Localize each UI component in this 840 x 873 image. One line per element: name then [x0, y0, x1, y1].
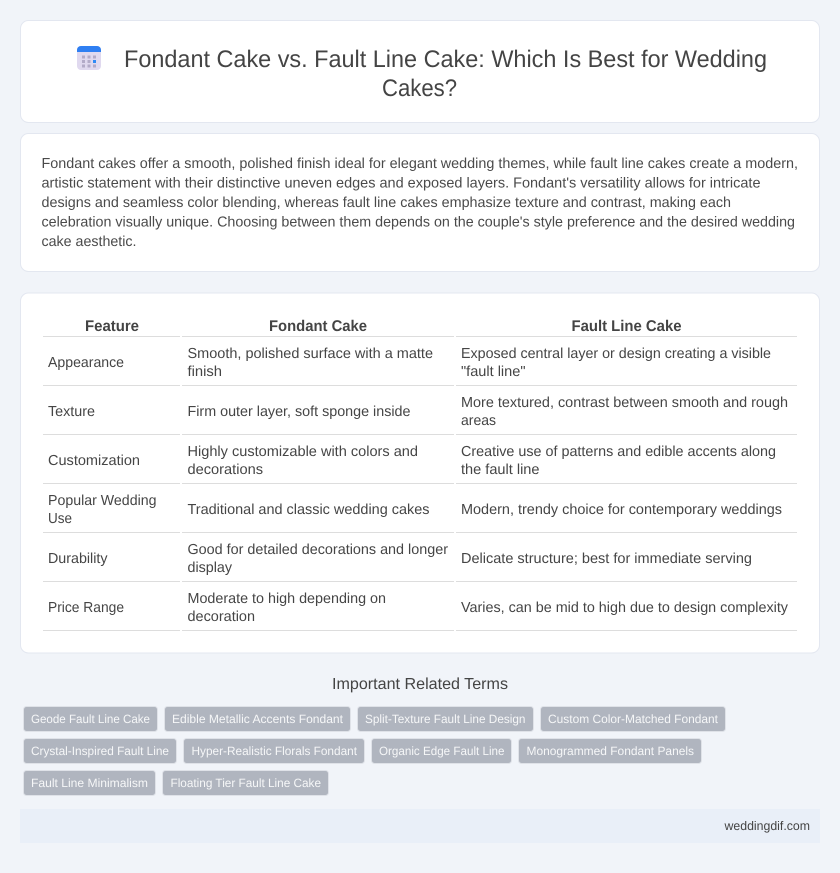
title: Cakes?	[382, 75, 457, 102]
tag: Fault Line Minimalism	[31, 776, 148, 790]
row: appearance	[48, 346, 771, 380]
tag	[162, 770, 328, 796]
row: popular wedding use: Popular Wedding	[48, 493, 156, 509]
heading: important related terms: Important Related Terms	[332, 676, 508, 693]
panel: intro text	[20, 134, 820, 272]
row: appearance: Appearance	[48, 355, 124, 371]
text block: intro paragraph: celebration visually unique. Choosing between them depends on the couple's style preference and the desired wedding	[42, 214, 795, 230]
table header: Fondant Cake	[269, 318, 367, 335]
row: texture	[48, 395, 788, 429]
table header: Feature	[85, 318, 139, 335]
row: texture: areas	[461, 413, 496, 429]
row: appearance: finish	[188, 364, 222, 380]
row: appearance: "fault line"	[461, 364, 526, 380]
row: texture: Texture	[48, 404, 95, 420]
text block: intro paragraph: artistic statement with their distinctive uneven edges and exposed layers. Fondant's versatility allows for intricate	[42, 176, 760, 192]
text block: intro paragraph: cake aesthetic.	[42, 234, 136, 250]
table header	[85, 318, 682, 335]
tag	[164, 706, 350, 732]
row: durability: Delicate structure; best for immediate serving	[461, 551, 752, 567]
row: texture: Firm outer layer, soft sponge inside	[188, 404, 410, 420]
row: customization: Customization	[48, 453, 140, 469]
row: popular wedding use: Traditional and classic wedding cakes	[188, 502, 430, 518]
footer: weddingdif.com	[724, 819, 810, 833]
title	[124, 46, 767, 102]
row: popular wedding use: Use	[48, 511, 72, 527]
row: price range	[48, 591, 789, 625]
row: durability: Durability	[48, 551, 108, 567]
row: customization: Creative use of patterns and edible accents along	[461, 444, 776, 460]
row: appearance: Smooth, polished surface with a matte	[188, 346, 433, 362]
icon: calendar	[77, 46, 101, 70]
row: popular wedding use	[48, 493, 782, 527]
footer	[20, 809, 820, 843]
row: durability: display	[188, 560, 233, 576]
tag: Organic Edge Fault Line	[379, 744, 505, 758]
panel: comparison table	[20, 293, 820, 653]
panel: header	[20, 20, 820, 122]
row: price range: Price Range	[48, 600, 124, 616]
tag	[518, 738, 702, 764]
table header: Fault Line Cake	[572, 318, 682, 335]
tag: Monogrammed Fondant Panels	[526, 744, 694, 758]
tag	[358, 706, 534, 732]
row: customization: decorations	[188, 462, 263, 478]
row: durability: Good for detailed decorations and longer	[188, 542, 448, 558]
related term tags	[24, 706, 726, 796]
tag: Crystal-Inspired Fault Line	[31, 744, 169, 758]
row: popular wedding use: Modern, trendy choice for contemporary weddings	[461, 502, 782, 518]
text block: intro paragraph: designs and seamless color blending, whereas fault line cakes emphasize texture and contrast, making each	[42, 195, 731, 211]
tag	[540, 706, 726, 732]
text block: intro paragraph	[42, 156, 798, 250]
tag	[24, 770, 156, 796]
row: durability	[48, 542, 752, 576]
tag	[24, 738, 176, 764]
row: price range: decoration	[188, 609, 255, 625]
tag: Custom Color-Matched Fondant	[548, 712, 719, 726]
row: customization: Highly customizable with colors and	[188, 444, 418, 460]
tag	[24, 706, 158, 732]
tag: Edible Metallic Accents Fondant	[172, 712, 344, 726]
tag	[372, 738, 512, 764]
row: customization: the fault line	[461, 462, 540, 478]
row: price range: Moderate to high depending on	[188, 591, 386, 607]
row: customization	[48, 444, 776, 478]
title: Fondant Cake vs. Fault Line Cake: Which Is Best for Wedding	[124, 46, 767, 73]
tag	[184, 738, 364, 764]
row: price range: Varies, can be mid to high due to design complexity	[461, 600, 789, 616]
text block: intro paragraph: Fondant cakes offer a smooth, polished finish ideal for elegant wedding themes, while fault line cakes create a modern,	[42, 156, 798, 172]
row: appearance: Exposed central layer or design creating a visible	[461, 346, 771, 362]
tag: Floating Tier Fault Line Cake	[170, 776, 321, 790]
tag: Geode Fault Line Cake	[31, 712, 150, 726]
row: texture: More textured, contrast between smooth and rough	[461, 395, 788, 411]
tag: Split-Texture Fault Line Design	[365, 712, 526, 726]
tag: Hyper-Realistic Florals Fondant	[192, 744, 358, 758]
